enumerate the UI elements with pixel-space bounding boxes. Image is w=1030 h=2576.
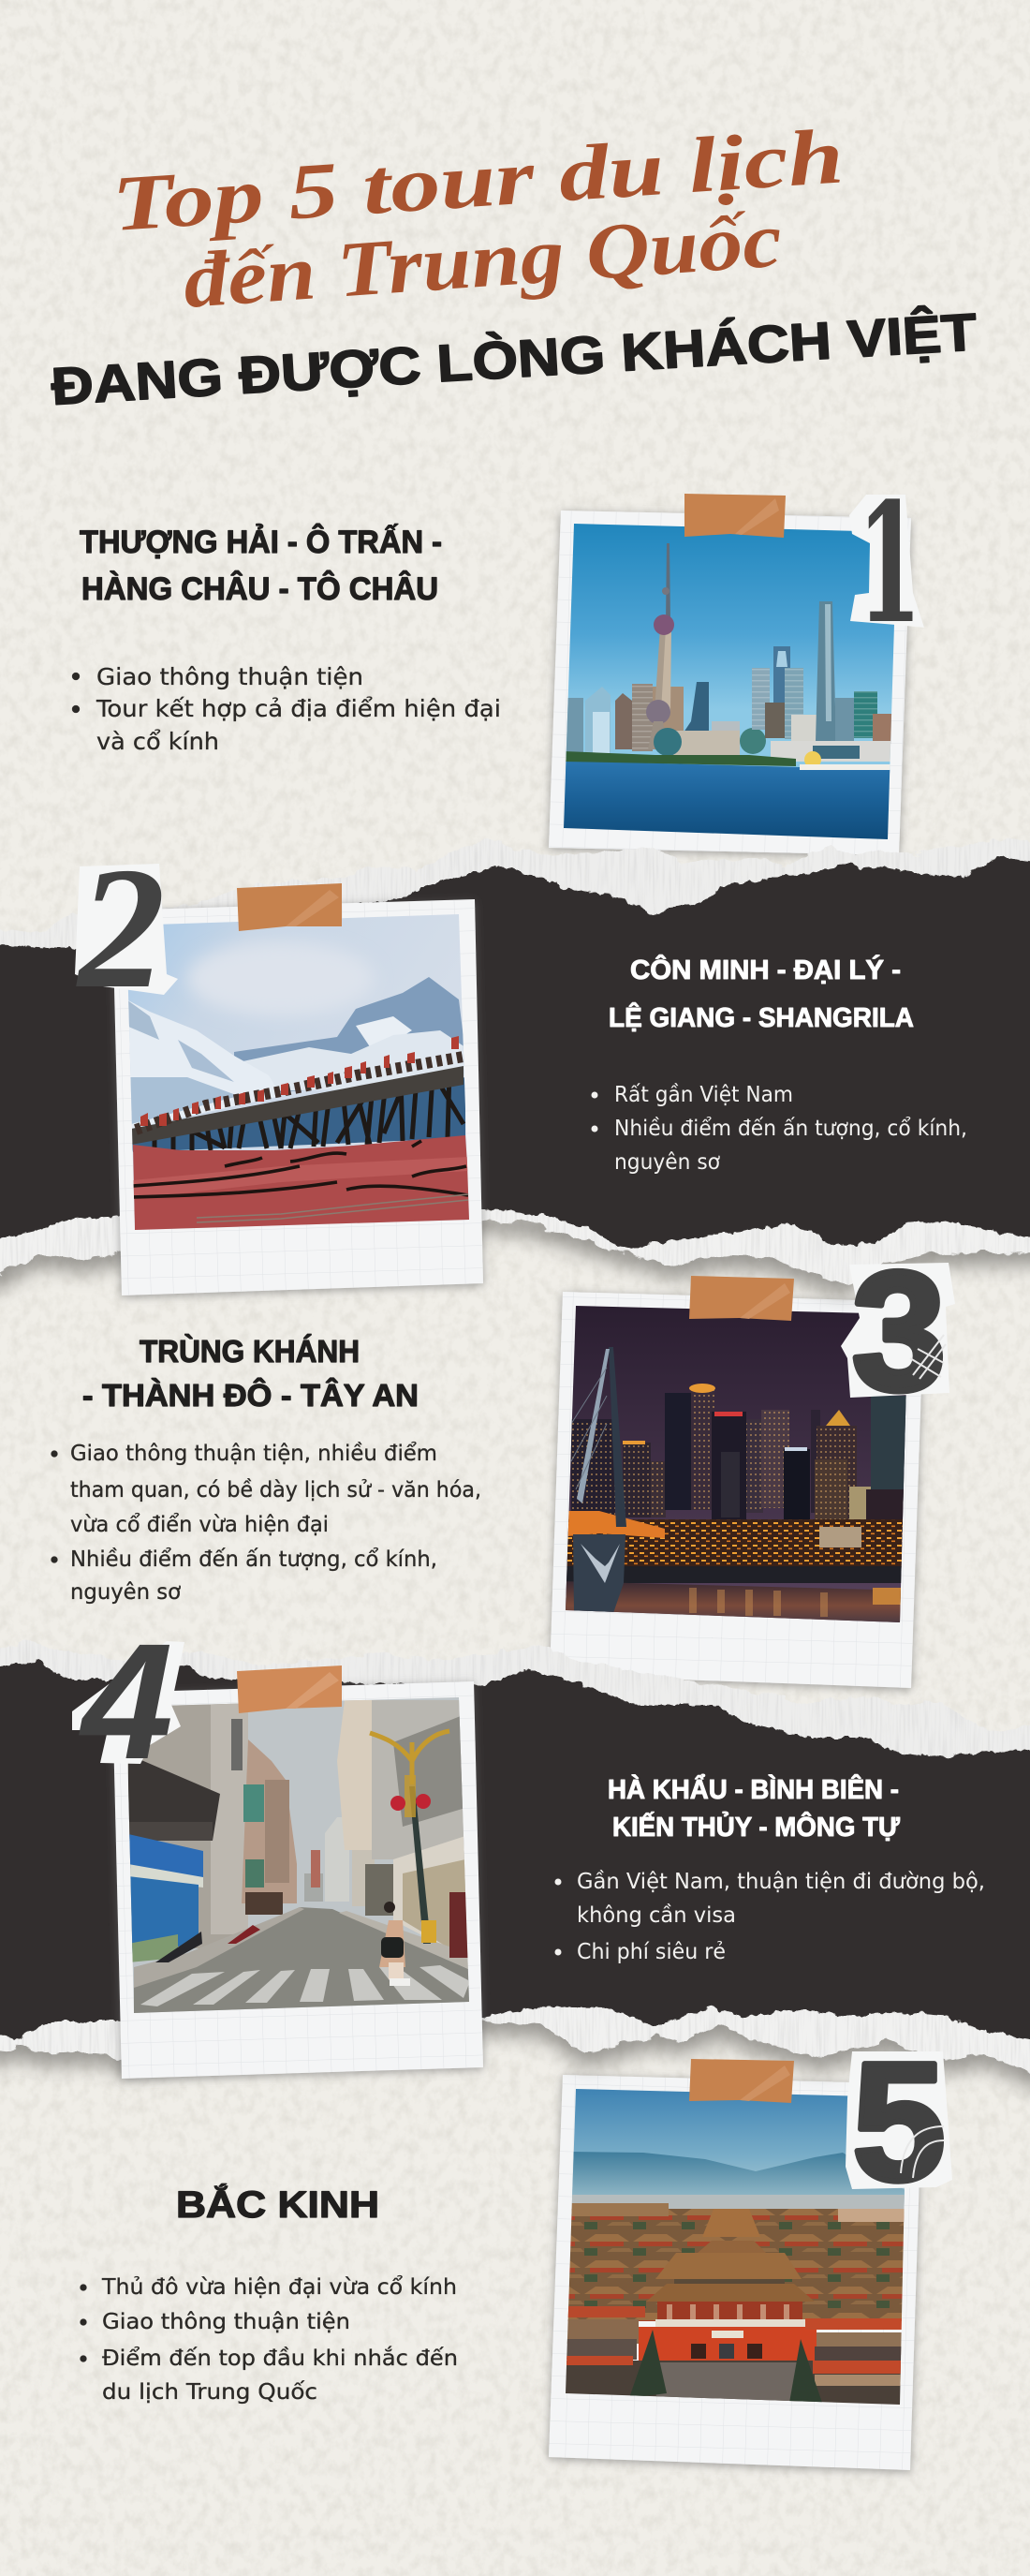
dark band (0, 1661, 1030, 2042)
number 5: 5 (852, 2028, 946, 2216)
heading 4 (608, 1773, 901, 1843)
photo: snow mountain and red rocks (122, 913, 473, 1232)
photo card 1: Shanghai (549, 511, 911, 855)
bullet list 4: không cần visa (577, 1903, 736, 1928)
heading 4: KIẾN THỦY - MÔNG TỰ (612, 1811, 901, 1843)
photo: Chongqing at night (562, 1302, 910, 1630)
heading 3: - THÀNH ĐÔ - TÂY AN (82, 1377, 419, 1413)
bullet list 2: nguyên sơ (614, 1150, 720, 1175)
bullet list 2 (592, 1083, 967, 1175)
number 3: 3 (852, 1237, 946, 1426)
torn band 2 (0, 1642, 1030, 2095)
number sticker 2 (75, 832, 178, 1025)
number sticker 5 (846, 2028, 952, 2216)
dark band (0, 857, 1030, 1249)
title (50, 112, 978, 416)
bullet list 4: Gần Việt Nam, thuận tiện đi đường bộ, (577, 1870, 985, 1894)
number sticker 4 (72, 1610, 184, 1794)
section 2 text (592, 954, 967, 1175)
photo card 3: Chongqing (550, 1292, 924, 1688)
title line: script 2: đến Trung Quốc (181, 197, 785, 325)
torn edge bottom (0, 1967, 1030, 2081)
bullet list 2: Rất gần Việt Nam (614, 1083, 793, 1107)
section 5 text (81, 2183, 458, 2405)
heading 5: BẮC KINH (176, 2183, 379, 2226)
tape 2 (237, 883, 342, 931)
torn band 1 (0, 838, 1030, 1298)
bullet list 3: nguyên sơ (70, 1580, 181, 1605)
bullet list 5: Giao thông thuận tiện (102, 2310, 350, 2334)
bullet list 4 (554, 1870, 985, 1964)
bullet list 2: Nhiều điểm đến ấn tượng, cổ kính, (614, 1117, 967, 1141)
bullet list 4: Chi phí siêu rẻ (577, 1940, 726, 1964)
bullet list 1: Tour kết hợp cả địa điểm hiện đại (96, 695, 501, 722)
number 1: 1 (858, 466, 921, 660)
heading 2 (609, 954, 914, 1033)
tape 5 (689, 2059, 794, 2103)
tape 4 (237, 1666, 342, 1713)
torn paper shadow (0, 1212, 1030, 1298)
title line: script 1: Top 5 tour du lịch (110, 112, 846, 248)
torn edge top (0, 1642, 1030, 1799)
bullet list 1: Giao thông thuận tiện (96, 663, 363, 690)
number sticker 3 (841, 1237, 955, 1426)
heading 4: HÀ KHẨU - BÌNH BIÊN - (608, 1773, 899, 1805)
bullet list 3: tham quan, có bề dày lịch sử - văn hóa, (70, 1478, 481, 1503)
number 2: 2 (75, 832, 165, 1025)
heading 1 (80, 524, 442, 607)
photo: street crossing (122, 1695, 473, 2016)
bullet list 1: và cổ kính (96, 728, 219, 755)
section 1 text (72, 524, 501, 755)
bullet list 5: du lịch Trung Quốc (102, 2380, 317, 2405)
photo card 2: Lijiang (112, 899, 483, 1295)
title line: bold subtitle: ĐANG ĐƯỢC LÒNG KHÁCH VIỆT (50, 302, 978, 416)
bullet list 5: Điểm đến top đầu khi nhắc đến (102, 2346, 458, 2371)
torn edge top (0, 838, 1030, 965)
heading 2: CÔN MINH - ĐẠI LÝ - (630, 954, 901, 985)
bullet list 3: Nhiều điểm đến ấn tượng, cổ kính, (70, 1547, 437, 1572)
photo: Forbidden City (562, 2087, 910, 2407)
tape 1 (684, 494, 786, 538)
bullet list 5 (81, 2275, 458, 2405)
bullet list 3 (51, 1442, 481, 1605)
photo: Shanghai skyline (562, 520, 904, 843)
heading 1: HÀNG CHÂU - TÔ CHÂU (81, 570, 438, 607)
bullet list 3: Giao thông thuận tiện, nhiều điểm (70, 1442, 437, 1466)
bullet list 3: vừa cổ điển vừa hiện đại (70, 1513, 329, 1537)
heading 3 (82, 1334, 419, 1413)
tape pieces (237, 494, 794, 2103)
number sticker 1 (849, 466, 924, 660)
photo card 5: Beijing (549, 2075, 922, 2470)
photo card 4: street (112, 1681, 483, 2079)
section 3 text (51, 1334, 481, 1605)
torn paper shadow (0, 1980, 1030, 2095)
number 4: 4 (79, 1610, 173, 1794)
heading 2: LỆ GIANG - SHANGRILA (609, 1001, 914, 1033)
section 4 text (554, 1773, 985, 1964)
bullet list 1 (72, 663, 501, 755)
heading 3: TRÙNG KHÁNH (140, 1334, 360, 1369)
heading 1: THƯỢNG HẢI - Ô TRẤN - (80, 524, 442, 560)
torn edge bottom (0, 1199, 1030, 1285)
tape 3 (689, 1276, 794, 1321)
bullet list 5: Thủ đô vừa hiện đại vừa cổ kính (101, 2275, 457, 2300)
